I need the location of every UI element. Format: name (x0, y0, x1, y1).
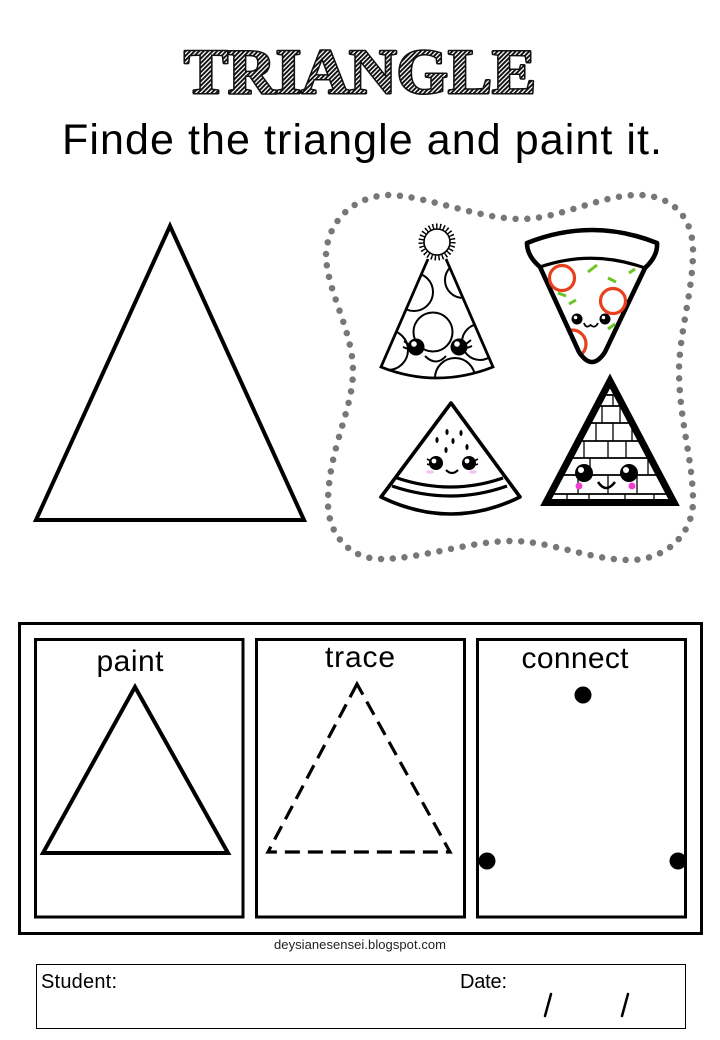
subtitle instruction: Finde the triangle and paint it. (62, 116, 662, 164)
connect label: connect (522, 642, 629, 675)
paint label: paint (96, 645, 164, 678)
title: TRIANGLE (184, 37, 536, 107)
activity frame (20, 624, 702, 934)
student and date box (36, 964, 686, 1028)
trace label: trace (325, 641, 395, 674)
large triangle to paint (36, 226, 304, 520)
solid triangle (43, 687, 228, 853)
date label: Date: (460, 971, 507, 993)
icon: party hat (379, 224, 495, 380)
website credit: deysianesensei.blogspot.com (274, 937, 446, 952)
date slashes (545, 994, 628, 1016)
panel: paint (36, 640, 243, 917)
icon: pizza slice (527, 230, 657, 362)
dotted blob border (326, 195, 693, 560)
student label: Student: (41, 971, 117, 993)
icon: watermelon slice (381, 403, 520, 514)
icon: pyramid (540, 381, 680, 503)
connect dots (478, 686, 686, 870)
panel: trace (256, 640, 464, 917)
dashed triangle (268, 684, 450, 852)
panel: connect (478, 640, 686, 917)
